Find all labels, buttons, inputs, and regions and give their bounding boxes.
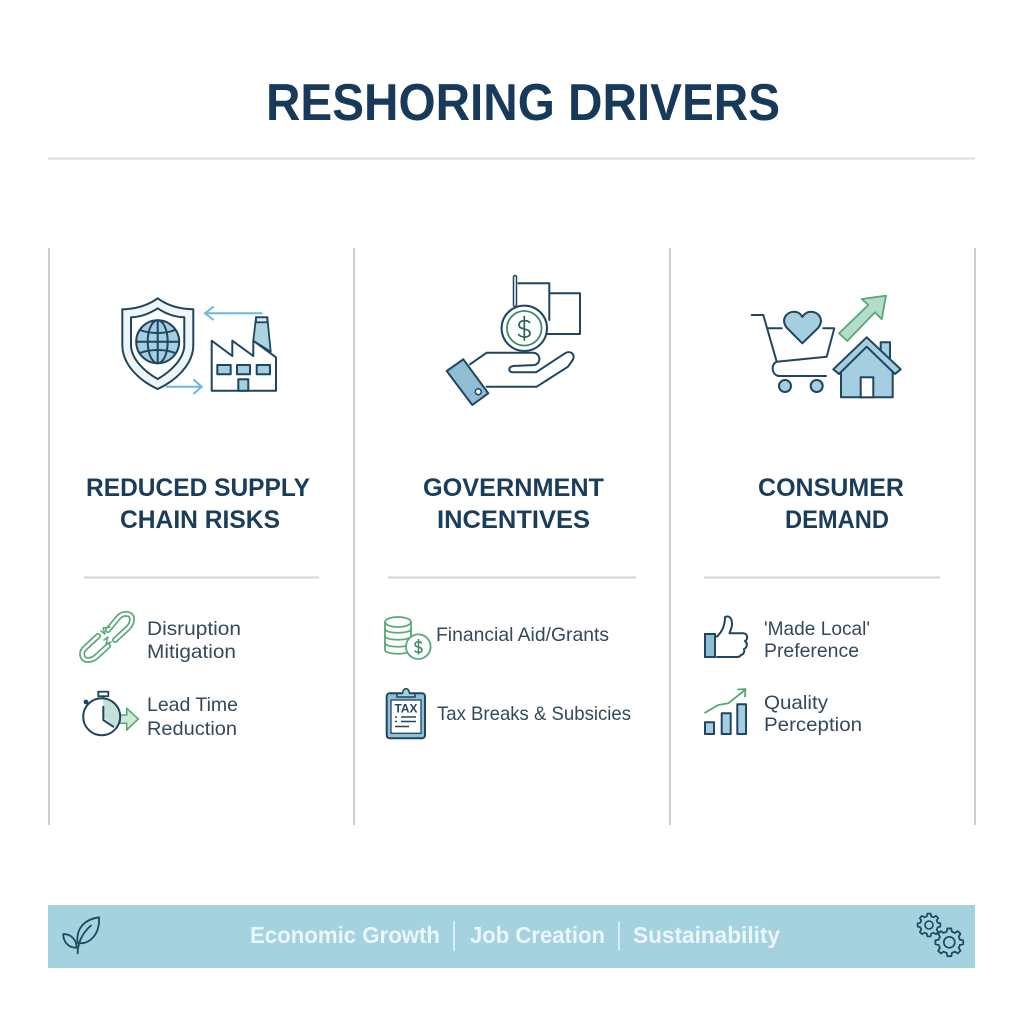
panel: government incentives <box>385 277 636 738</box>
banner text: sustainability: Sustainability <box>633 922 780 948</box>
icon: thumbs up <box>705 616 747 657</box>
text: disruption mitigation: Mitigation <box>147 641 236 663</box>
icon: gears <box>918 914 963 956</box>
text: disruption mitigation: Disruption <box>147 618 241 640</box>
icon: broken chain <box>82 614 132 660</box>
icon: bar chart with trend arrow <box>705 689 746 734</box>
text: lead time reduction <box>147 694 238 740</box>
icon: shield, globe and factory <box>122 298 276 394</box>
icon: cart, house and arrow <box>752 296 901 397</box>
text: made local preference: 'Made Local' <box>764 618 870 640</box>
text: made local preference: Preference <box>764 640 859 662</box>
panel: reduced supply chain risks <box>82 298 319 740</box>
banner text: job creation: Job Creation <box>470 922 605 948</box>
heading: government incentives: GOVERNMENT <box>423 474 604 502</box>
text: financial aid: Financial Aid/Grants <box>436 624 609 646</box>
heading: consumer demand: DEMAND <box>785 506 889 534</box>
icon: leaf <box>63 917 99 953</box>
banner text: economic growth: Economic Growth <box>250 922 440 948</box>
text: made local preference <box>764 618 870 662</box>
heading: government incentives <box>423 474 604 534</box>
icon: stopwatch <box>83 692 138 735</box>
title: RESHORING DRIVERS <box>266 74 780 132</box>
text: quality perception: Quality <box>764 692 828 714</box>
heading: consumer demand: CONSUMER <box>758 474 904 502</box>
heading: reduced supply chain risks: REDUCED SUPPLY <box>86 474 310 502</box>
panel: consumer demand <box>704 296 940 736</box>
text: lead time reduction: Reduction <box>147 718 237 740</box>
text: tax breaks: Tax Breaks & Subsicies <box>437 703 631 725</box>
icon: tax clipboard: TAX <box>394 704 418 716</box>
heading: government incentives: INCENTIVES <box>437 506 590 534</box>
icon: hand holding coin with flag <box>447 277 580 405</box>
heading: reduced supply chain risks: CHAIN RISKS <box>120 506 280 534</box>
text: quality perception <box>764 692 862 736</box>
footer banner <box>48 905 975 968</box>
heading: reduced supply chain risks <box>86 474 310 534</box>
heading: consumer demand <box>758 474 904 534</box>
text: quality perception: Perception <box>764 714 862 736</box>
icon: tax clipboard <box>387 689 425 738</box>
text: lead time reduction: Lead Time <box>147 694 238 716</box>
text: disruption mitigation <box>147 618 241 663</box>
icon: coin stack <box>385 617 431 659</box>
